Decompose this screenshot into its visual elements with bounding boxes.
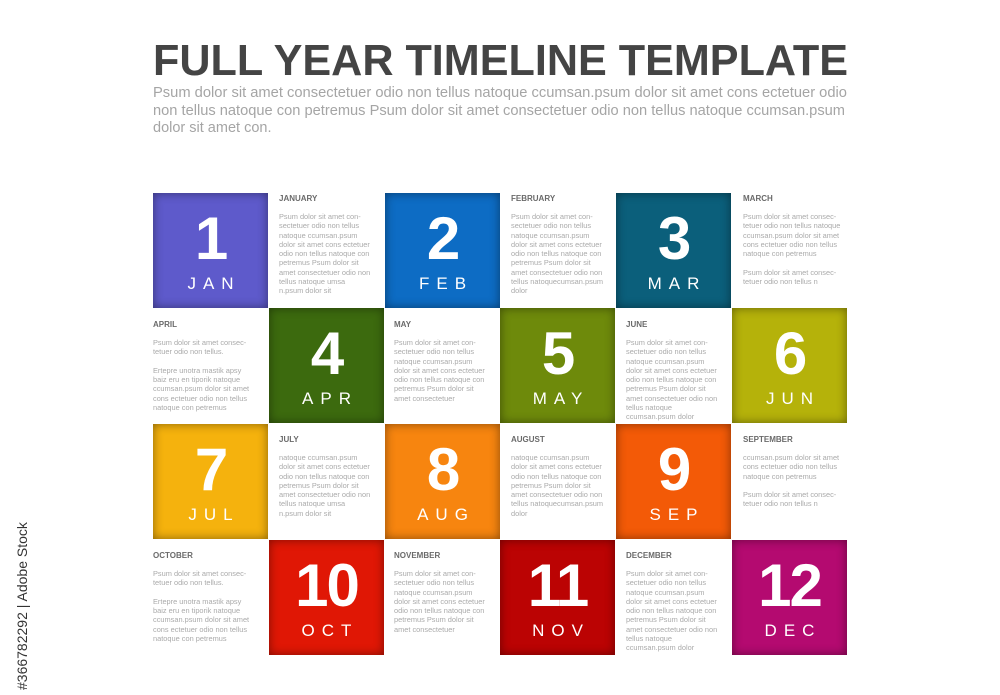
text: august: tellus natoquecumsan.psum	[511, 499, 603, 508]
text: january: JANUARY	[279, 194, 317, 203]
text: april: natoque con petremus	[153, 403, 227, 412]
text: august: odio non tellus natoque con	[511, 472, 601, 481]
text: july: amet consectetuer odio non	[279, 490, 370, 499]
text: february: amet consectetuer odio non	[511, 268, 602, 277]
tile: 7 JUL: 7	[195, 436, 226, 503]
tile: 4 APR	[269, 308, 384, 423]
text: january: dolor sit amet cons ectetuer	[279, 240, 370, 249]
text: december: natoque ccumsan.psum	[626, 588, 704, 597]
text: june: ccumsan.psum dolor	[626, 412, 694, 421]
text: september: cons ectetuer odio non tellus	[743, 462, 837, 471]
tile: 12 DEC	[732, 540, 847, 655]
text: december: DECEMBER	[626, 551, 672, 560]
text: may: natoque ccumsan.psum	[394, 357, 472, 366]
text: april: Psum dolor sit amet consec-	[153, 338, 246, 347]
text: february: dolor	[511, 286, 527, 295]
text: april: tetuer odio non tellus.	[153, 347, 224, 356]
tile: 6 JUN	[732, 308, 847, 423]
text: june: Psum dolor sit amet con-	[626, 338, 708, 347]
text: august: dolor sit amet cons ectetuer	[511, 462, 602, 471]
text: july	[279, 435, 370, 518]
text: september: natoque con petremus	[743, 472, 817, 481]
text: june: natoque ccumsan.psum	[626, 357, 704, 366]
text: october: baiz eru en tiporik natoque	[153, 606, 240, 615]
tile: 6 JUN: 6	[774, 320, 805, 387]
subtitle: dolor sit amet con.	[153, 120, 271, 136]
tile: 10 OCT: 10	[295, 552, 358, 619]
tile: 9 SEP: SEP	[649, 505, 705, 524]
text: may: petremus Psum dolor sit	[394, 384, 474, 393]
text: july: JULY	[279, 435, 299, 444]
text: march: cons ectetuer odio non tellus	[743, 240, 837, 249]
subtitle: Psum dolor sit amet consectetuer odio non tellus natoque ccumsan.psum dolor sit amet cons ectetuer odio	[153, 85, 847, 101]
text: september: tetuer odio non tellus n	[743, 499, 818, 508]
text: december: Psum dolor sit amet con-	[626, 569, 708, 578]
text: may: odio non tellus natoque con	[394, 375, 484, 384]
text: january: natoque ccumsan.psum	[279, 231, 357, 240]
text: july: n.psum dolor sit	[279, 509, 331, 518]
tile: 4 APR: 4	[311, 320, 342, 387]
text: february: tellus natoquecumsan.psum	[511, 277, 603, 286]
text: june: dolor sit amet cons ectetuer	[626, 366, 717, 375]
text: november: natoque ccumsan.psum	[394, 588, 472, 597]
text: february: Psum dolor sit amet con-	[511, 212, 593, 221]
text: august: amet consectetuer odio non	[511, 490, 602, 499]
tile: 7 JUL	[153, 424, 268, 539]
text: may: sectetuer odio non tellus	[394, 347, 474, 356]
text: march: natoque con petremus	[743, 249, 817, 258]
text: april: Ertepre unotra mastik apsy	[153, 366, 241, 375]
tile: 1 JAN: JAN	[187, 274, 241, 293]
text: september	[743, 435, 839, 508]
text: february: odio non tellus natoque con	[511, 249, 601, 258]
text: december: tellus natoque	[626, 634, 672, 643]
text: july: natoque ccumsan.psum	[279, 453, 357, 462]
text: december: dolor sit amet cons ectetuer	[626, 597, 717, 606]
text: june: sectetuer odio non tellus	[626, 347, 706, 356]
text: september: ccumsan.psum dolor sit amet	[743, 453, 839, 462]
text: june	[626, 320, 717, 421]
text: january: sectetuer odio non tellus	[279, 221, 359, 230]
text: september: Psum dolor sit amet consec-	[743, 490, 836, 499]
text: july: dolor sit amet cons ectetuer	[279, 462, 370, 471]
text: february: FEBRUARY	[511, 194, 555, 203]
text: july: tellus natoque umsa	[279, 499, 345, 508]
text: february: petremus Psum dolor sit	[511, 258, 591, 267]
text: january: odio non tellus natoque con	[279, 249, 369, 258]
tile: 1 JAN	[153, 193, 268, 308]
text: april: ccumsan.psum dolor sit amet	[153, 384, 249, 393]
text: april: APRIL	[153, 320, 177, 329]
tile: 11 NOV	[500, 540, 615, 655]
text: february	[511, 194, 603, 295]
text: june: JUNE	[626, 320, 647, 329]
tile: 3 MAR: 3	[658, 205, 689, 272]
text: march: tetuer odio non tellus n	[743, 277, 818, 286]
text: january: Psum dolor sit amet con-	[279, 212, 361, 221]
tile: 8 AUG	[385, 424, 500, 539]
text: january: amet consectetuer odio non	[279, 268, 370, 277]
text: june: amet consectetuer odio non	[626, 394, 717, 403]
text: november	[394, 551, 485, 634]
text: june: tellus natoque	[626, 403, 672, 412]
text: november: petremus Psum dolor sit	[394, 615, 474, 624]
text: november: Psum dolor sit amet con-	[394, 569, 476, 578]
tile: 2 FEB: FEB	[419, 274, 473, 293]
text: november: NOVEMBER	[394, 551, 440, 560]
text: october	[153, 551, 249, 643]
text: february: sectetuer odio non tellus	[511, 221, 591, 230]
text: march: ccumsan.psum dolor sit amet	[743, 231, 839, 240]
subtitle: non tellus natoque con petremus Psum dolor sit amet consectetuer odio non tellus natoque ccumsan.psum	[153, 103, 845, 119]
tile: 2 FEB: 2	[427, 205, 458, 272]
tile: 1 JAN: 1	[195, 205, 226, 272]
text: march: tetuer odio non tellus natoque	[743, 221, 840, 230]
text: april: baiz eru en tiporik natoque	[153, 375, 240, 384]
text: august: petremus Psum dolor sit	[511, 481, 591, 490]
text: february: dolor sit amet cons ectetuer	[511, 240, 602, 249]
tile: 11 NOV: NOV	[532, 621, 590, 640]
text: july: odio non tellus natoque con	[279, 472, 369, 481]
tile: 9 SEP	[616, 424, 731, 539]
tile: 8 AUG: AUG	[417, 505, 475, 524]
text: june: petremus Psum dolor sit	[626, 384, 706, 393]
text: october: ccumsan.psum dolor sit amet	[153, 615, 249, 624]
text: may: amet consectetuer	[394, 394, 455, 403]
text: november: amet consectetuer	[394, 625, 455, 634]
text: june: odio non tellus natoque con	[626, 375, 716, 384]
text: august	[511, 435, 603, 518]
tile: 3 MAR	[616, 193, 731, 308]
text: december: amet consectetuer odio non	[626, 625, 717, 634]
tile: 10 OCT	[269, 540, 384, 655]
tile: 9 SEP: 9	[658, 436, 689, 503]
subtitle	[153, 85, 847, 136]
tile: 2 FEB	[385, 193, 500, 308]
tile: 8 AUG: 8	[427, 436, 458, 503]
tile: 10 OCT: OCT	[302, 621, 358, 640]
text: august: dolor	[511, 509, 527, 518]
text: january	[279, 194, 370, 295]
text: january: tellus natoque umsa	[279, 277, 345, 286]
text: november: dolor sit amet cons ectetuer	[394, 597, 485, 606]
text: october: tetuer odio non tellus.	[153, 578, 224, 587]
tile: 12 DEC: DEC	[765, 621, 821, 640]
text: october: Psum dolor sit amet consec-	[153, 569, 246, 578]
text: november: sectetuer odio non tellus	[394, 578, 474, 587]
text: november: odio non tellus natoque con	[394, 606, 484, 615]
tile: 12 DEC: 12	[758, 552, 821, 619]
text: december	[626, 551, 717, 652]
text: january: petremus Psum dolor sit	[279, 258, 359, 267]
text: december: sectetuer odio non tellus	[626, 578, 706, 587]
text: march: MARCH	[743, 194, 773, 203]
tile: 3 MAR: MAR	[648, 274, 706, 293]
text: march	[743, 194, 840, 286]
text: december: odio non tellus natoque con	[626, 606, 716, 615]
tile: 5 MAY: MAY	[533, 389, 589, 408]
tile: 11 NOV: 11	[528, 552, 587, 619]
tile: 6 JUN: JUN	[766, 389, 820, 408]
side caption: #366782292 | Adobe Stock	[14, 522, 30, 690]
text: may: MAY	[394, 320, 411, 329]
text: march: Psum dolor sit amet consec-	[743, 212, 836, 221]
text: may: dolor sit amet cons ectetuer	[394, 366, 485, 375]
text: december: ccumsan.psum dolor	[626, 643, 694, 652]
text: march: Psum dolor sit amet consec-	[743, 268, 836, 277]
tile: 5 MAY	[500, 308, 615, 423]
text: may	[394, 320, 485, 403]
tile: 5 MAY: 5	[542, 320, 573, 387]
text: july: petremus Psum dolor sit	[279, 481, 359, 490]
text: april: cons ectetuer odio non tellus	[153, 394, 247, 403]
text: december: petremus Psum dolor sit	[626, 615, 706, 624]
text: october: OCTOBER	[153, 551, 193, 560]
tile: 4 APR: APR	[302, 389, 358, 408]
text: february: natoque ccumsan.psum	[511, 231, 589, 240]
text: august: natoque ccumsan.psum	[511, 453, 589, 462]
text: october: cons ectetuer odio non tellus	[153, 625, 247, 634]
tile: 7 JUL: JUL	[188, 505, 240, 524]
text: january: n.psum dolor sit	[279, 286, 331, 295]
title: FULL YEAR TIMELINE TEMPLATE	[153, 36, 848, 85]
text: august: AUGUST	[511, 435, 545, 444]
text: october: natoque con petremus	[153, 634, 227, 643]
text: september: SEPTEMBER	[743, 435, 793, 444]
text: october: Ertepre unotra mastik apsy	[153, 597, 241, 606]
text: may: Psum dolor sit amet con-	[394, 338, 476, 347]
text: april	[153, 320, 249, 412]
